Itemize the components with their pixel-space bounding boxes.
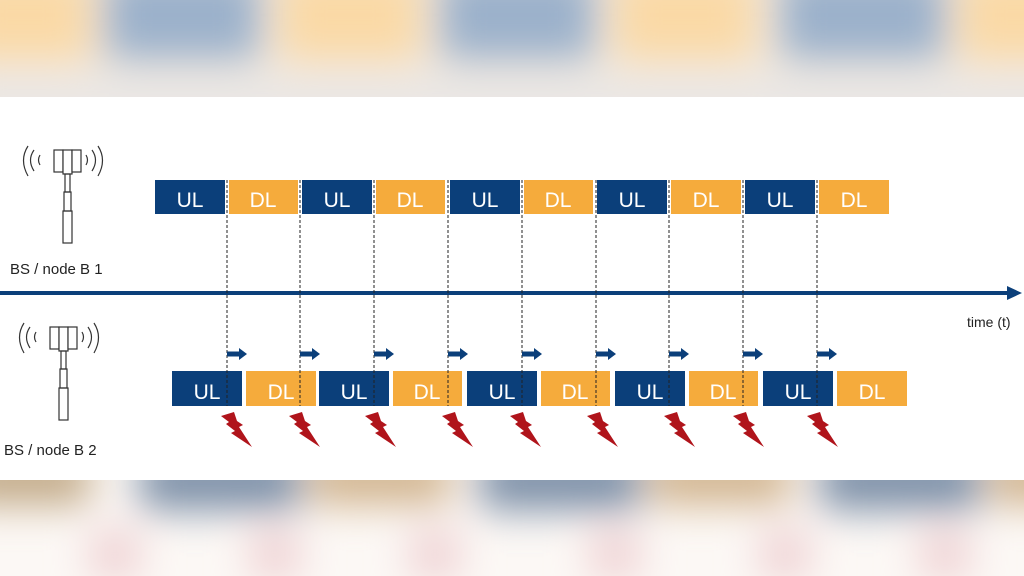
row 1 frames: UL <box>767 189 793 212</box>
row 2 frames: UL <box>489 381 515 404</box>
row 2 frames: DL <box>268 381 294 404</box>
row 2 frames: UL <box>341 381 367 404</box>
row 2 frames: DL <box>562 381 588 404</box>
row 2 frames: DL <box>710 381 736 404</box>
blurred top band <box>0 0 1024 97</box>
row 2 frames: UL <box>637 381 663 404</box>
axis label: time (t) <box>967 314 1011 330</box>
row 1 frames: UL <box>472 189 498 212</box>
row 1 frames: UL <box>619 189 645 212</box>
icon: tower BS 1 <box>24 146 102 243</box>
row 1 frames: UL <box>177 189 203 212</box>
dashed sync lines <box>227 180 817 406</box>
row 1 frames: DL <box>397 189 423 212</box>
row 2 frames: UL <box>194 381 220 404</box>
row 1 frames: DL <box>250 189 276 212</box>
label BS2: BS / node B 2 <box>4 442 97 459</box>
row 2 frames: DL <box>859 381 885 404</box>
row 2 frames <box>172 371 907 406</box>
time axis arrow <box>0 286 1022 300</box>
row 2 frames: UL <box>785 381 811 404</box>
row 1 frames: DL <box>545 189 571 212</box>
row 1 frames <box>155 180 889 214</box>
blurred bottom band <box>0 480 1024 576</box>
shift arrows <box>227 348 837 360</box>
row 1 frames: UL <box>324 189 350 212</box>
icon: tower BS 2 <box>20 323 98 420</box>
label BS1: BS / node B 1 <box>10 261 103 278</box>
row 2 frames: DL <box>414 381 440 404</box>
row 1 frames: DL <box>841 189 867 212</box>
interference bolts <box>221 412 838 447</box>
row 1 frames: DL <box>693 189 719 212</box>
